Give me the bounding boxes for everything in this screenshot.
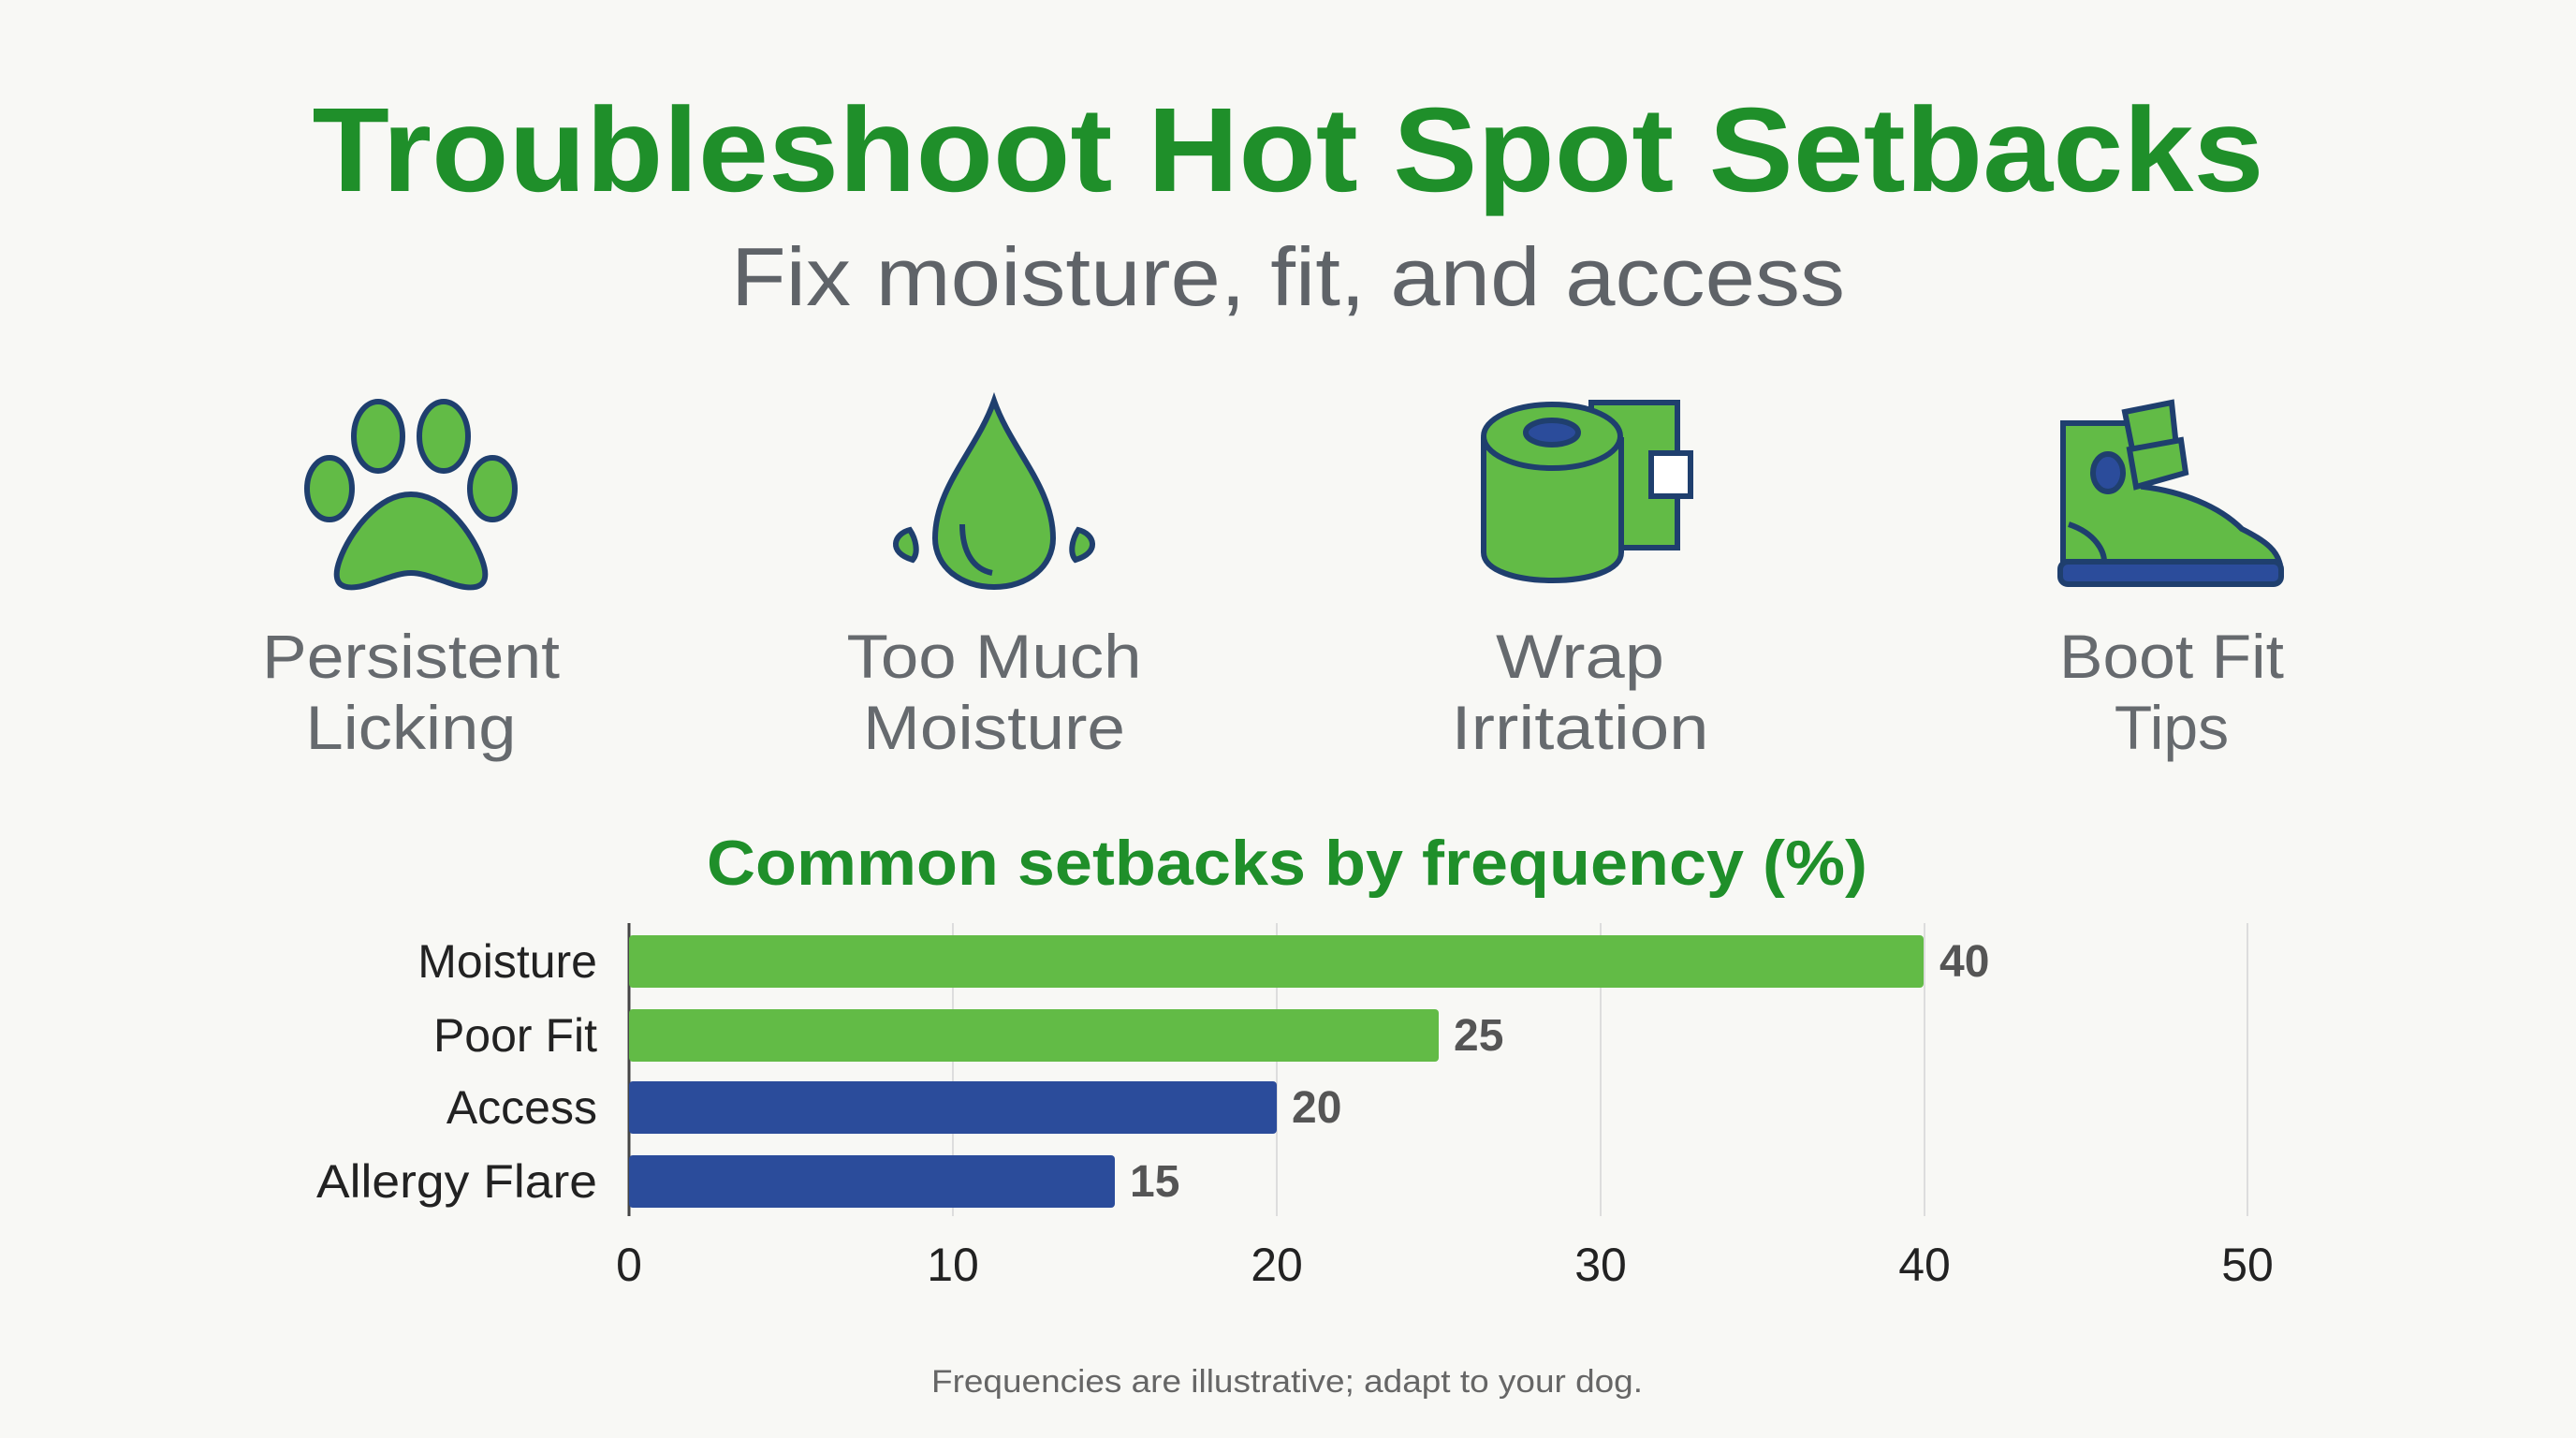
label: Persistent Licking: Licking <box>305 693 517 762</box>
label: Too Much Moisture: Moisture <box>863 693 1125 762</box>
label: Too Much Moisture: Too Much <box>846 622 1142 691</box>
bar chart: 25 <box>1454 1011 1503 1061</box>
chart title: Common setbacks by frequency (%) <box>707 828 1867 899</box>
bar chart: 15 <box>1130 1157 1179 1207</box>
bar chart: 20 <box>1251 1239 1303 1291</box>
label: Wrap Irritation: Irritation <box>1451 693 1709 762</box>
icon: wrap roll <box>1484 403 1690 580</box>
bar chart: 40 <box>1939 937 1989 987</box>
bar chart: 0 <box>616 1239 642 1291</box>
bar chart: Poor Fit <box>433 1009 597 1062</box>
label: Persistent Licking <box>262 622 560 762</box>
bar chart: Access <box>446 1081 597 1134</box>
bar chart: 50 <box>2221 1239 2274 1291</box>
icon: boot <box>2060 403 2281 584</box>
bar chart: 10 <box>927 1239 979 1291</box>
label: Boot Fit Tips <box>2059 622 2284 762</box>
bar chart <box>316 923 2274 1291</box>
icon: paw <box>307 402 515 587</box>
label: Wrap Irritation: Wrap <box>1496 622 1664 691</box>
label: Boot Fit Tips: Boot Fit <box>2059 622 2284 691</box>
label: Boot Fit Tips: Tips <box>2115 693 2229 762</box>
subtitle: Fix moisture, fit, and access <box>731 230 1845 323</box>
label: Persistent Licking: Persistent <box>262 622 560 691</box>
icon: water drop <box>896 401 1092 587</box>
bar chart: Moisture <box>417 935 597 988</box>
bar chart: 20 <box>1292 1083 1341 1133</box>
title: Troubleshoot Hot Spot Setbacks <box>313 83 2263 217</box>
label: Wrap Irritation <box>1451 622 1709 762</box>
label: Too Much Moisture <box>846 622 1142 762</box>
bar chart: Allergy Flare <box>316 1155 597 1208</box>
bar chart: 40 <box>1898 1239 1951 1291</box>
footnote: Frequencies are illustrative; adapt to your dog. <box>931 1364 1643 1400</box>
bar chart: 30 <box>1574 1239 1627 1291</box>
